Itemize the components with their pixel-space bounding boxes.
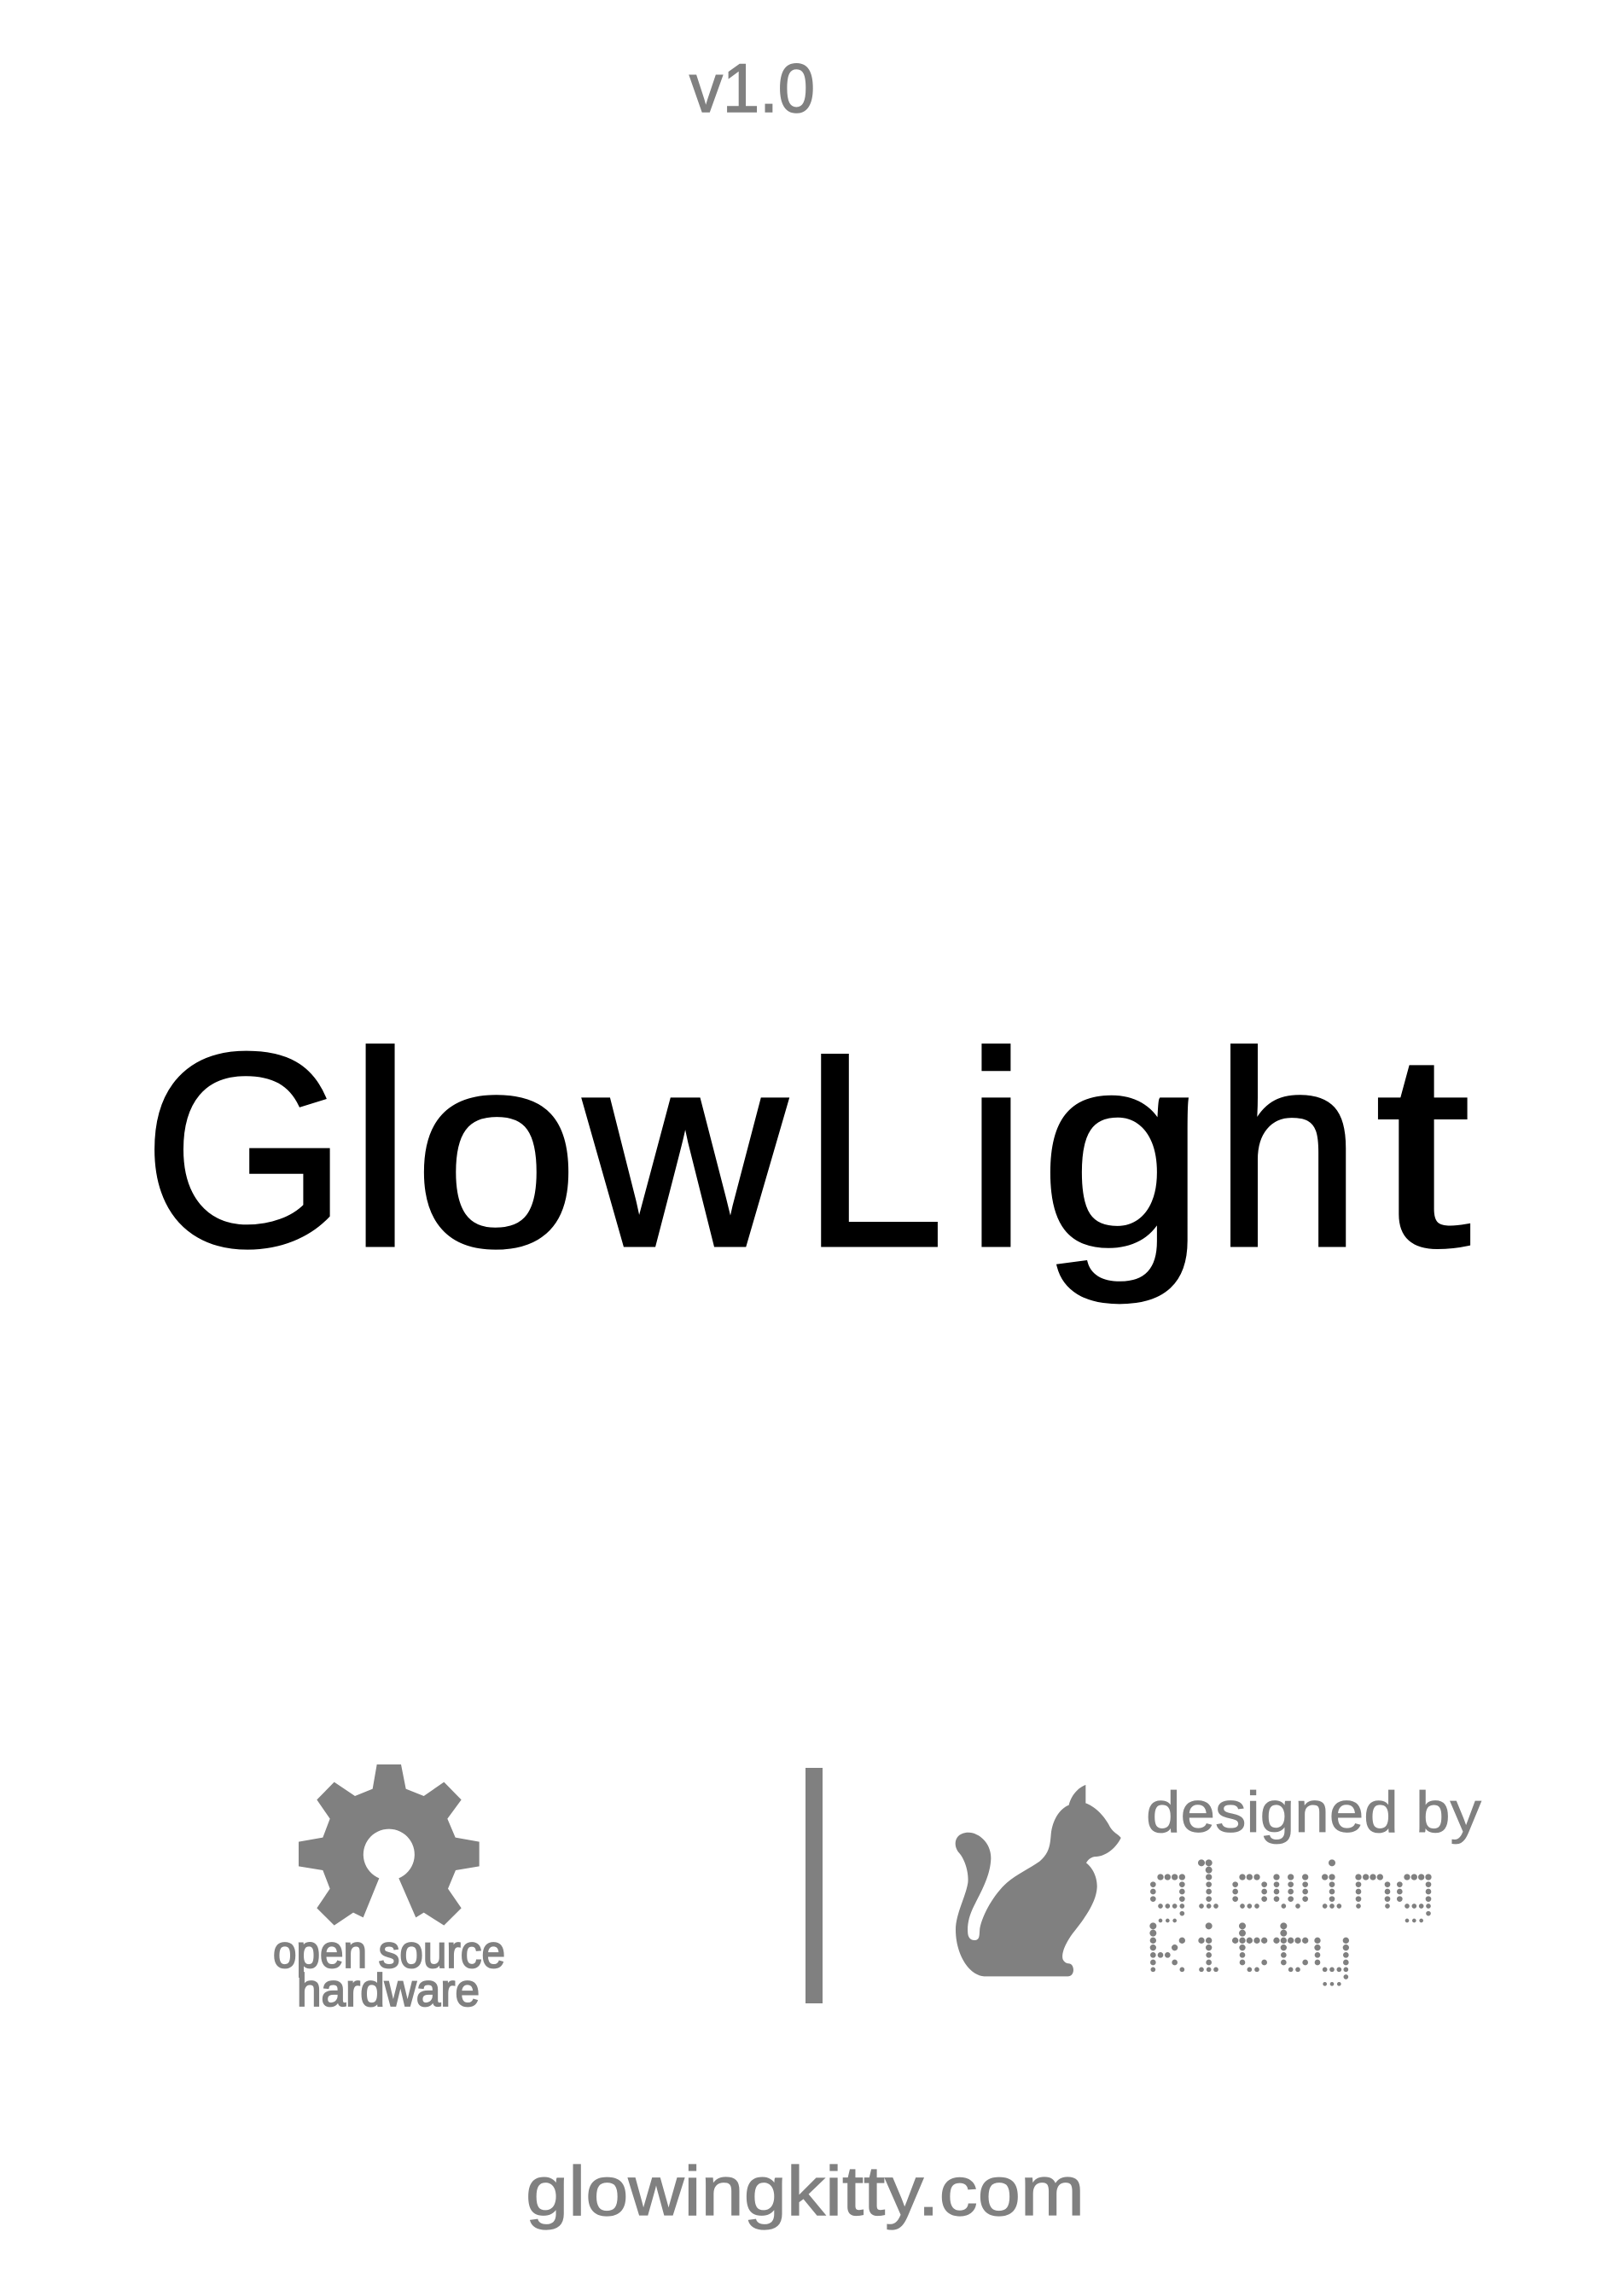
title: GlowLight: h <box>1214 997 1361 1304</box>
icon: open source gear <box>299 1764 480 1926</box>
title: GlowLight: G <box>143 997 347 1304</box>
title: GlowLight: o <box>414 997 579 1304</box>
logo text: hardware: hardware <box>297 1965 480 2016</box>
title: GlowLight: L <box>802 997 945 1304</box>
title: GlowLight <box>143 997 1471 1304</box>
title: GlowLight: l <box>349 997 411 1304</box>
icon: open source hardware logo <box>273 1764 505 2016</box>
website URL: glowingkitty.com <box>526 2153 1085 2230</box>
title: GlowLight: i <box>965 997 1027 1304</box>
title: GlowLight: t <box>1375 997 1470 1304</box>
logo text: open source: open source <box>273 1927 505 1978</box>
text: designed by: designed by <box>1146 1780 1481 1845</box>
version label: v1.0 <box>689 50 815 127</box>
logo: glowing kitty dot matrix wordmark <box>1150 1860 1428 1984</box>
vertical divider bar <box>806 1768 823 2003</box>
title: GlowLight: g <box>1040 997 1205 1304</box>
title: GlowLight: w <box>584 997 787 1304</box>
icon: sitting cat <box>956 1785 1121 1976</box>
